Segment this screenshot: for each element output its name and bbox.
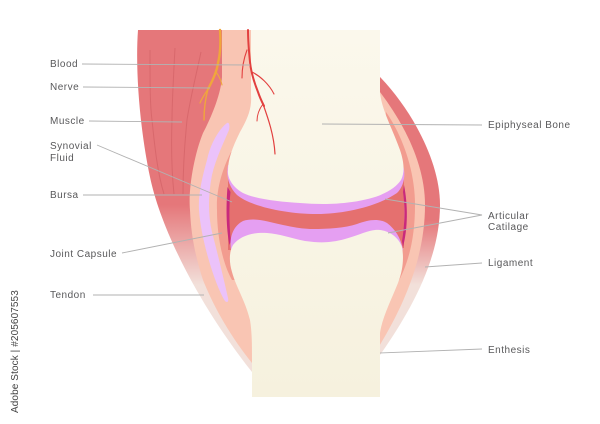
epiphyseal bone upper — [228, 30, 404, 204]
label: Muscle: Muscle — [50, 116, 85, 127]
muscle and tendon sheath — [137, 30, 252, 372]
salmon capsule left — [217, 150, 245, 280]
nerve — [200, 30, 222, 120]
lower cartilage — [230, 220, 403, 262]
bursa — [199, 123, 229, 302]
right capsule layers — [375, 77, 440, 355]
label: Articular Catilage: Catilage — [488, 222, 529, 233]
label: Bursa: Bursa — [50, 190, 79, 201]
joint membrane — [227, 185, 407, 247]
label: Blood: Blood — [50, 59, 78, 70]
muscle fibres — [150, 48, 201, 194]
blood vessels — [242, 30, 275, 154]
label: Synovial Fluid: Synovial — [50, 141, 92, 152]
bone lower — [230, 230, 403, 397]
upper cartilage — [227, 165, 404, 214]
stock credit: Adobe Stock | #205607553 — [10, 290, 21, 413]
joint cavity — [228, 175, 404, 250]
ligament peach band left — [190, 30, 252, 363]
label: Enthesis: Enthesis — [488, 345, 530, 356]
label: Nerve: Nerve — [50, 82, 79, 93]
label: Ligament: Ligament — [488, 258, 533, 269]
label: Epiphyseal Bone: Epiphyseal Bone — [488, 120, 571, 131]
label: Synovial Fluid: Fluid — [50, 153, 74, 164]
label: Articular Catilage: Articular — [488, 211, 529, 222]
leader lines — [82, 64, 482, 353]
label: Joint Capsule: Joint Capsule — [50, 249, 117, 260]
label: Tendon: Tendon — [50, 290, 86, 301]
